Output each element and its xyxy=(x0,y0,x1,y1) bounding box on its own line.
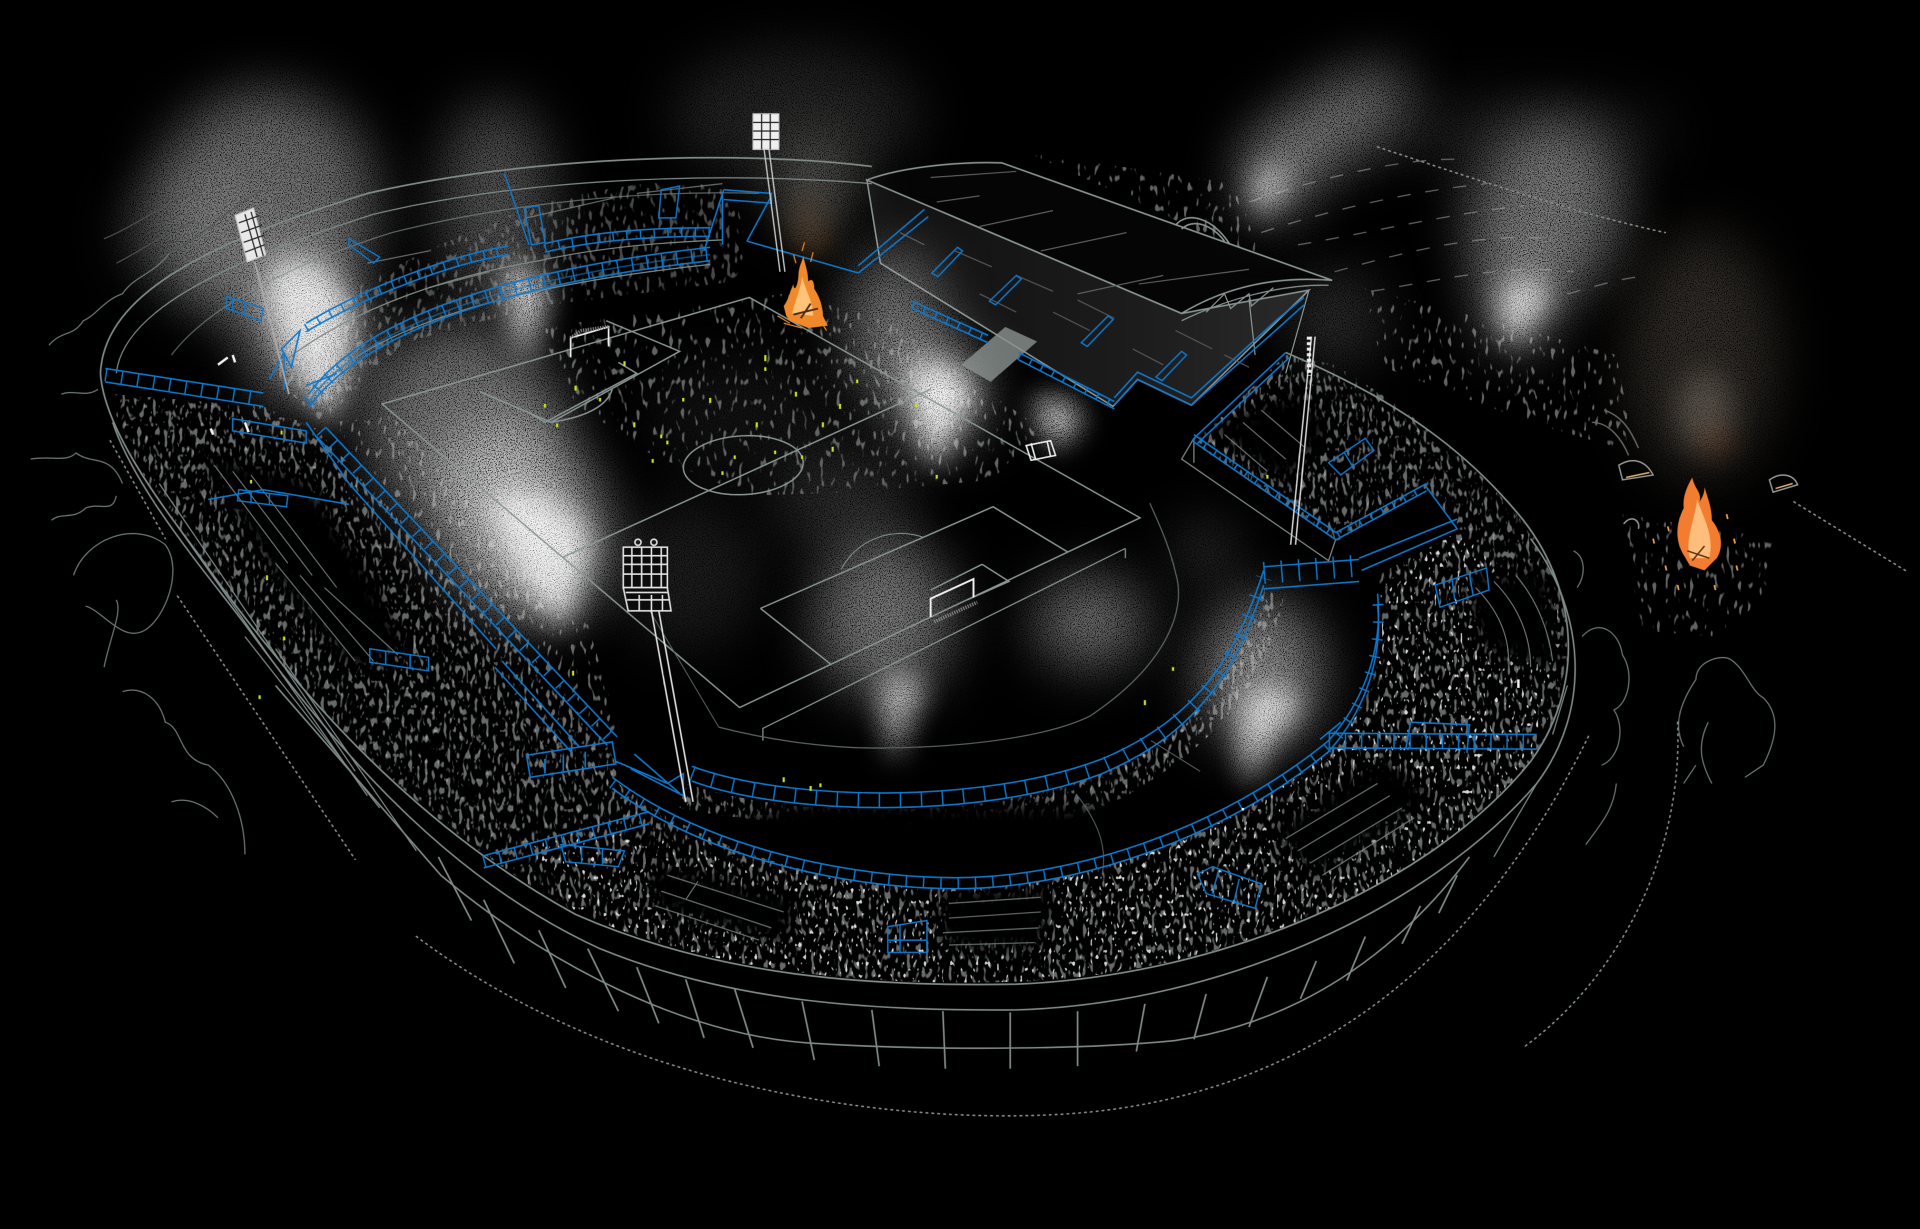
main stand xyxy=(867,163,1332,406)
blue barriers xyxy=(105,174,1537,952)
smoke core: right curve xyxy=(1239,687,1300,783)
smoke core: left touchline xyxy=(490,490,590,624)
plume: pitch goal cloud xyxy=(817,539,951,698)
stairway boxes xyxy=(227,174,1489,952)
barrier: left stand xyxy=(105,331,337,443)
crowd: lower tier xyxy=(113,355,1568,982)
plume: outside top cloud xyxy=(1230,47,1427,210)
roof arch xyxy=(1176,218,1229,244)
crowd: outside the stadium xyxy=(1029,153,1776,637)
smoke core: stand right xyxy=(1035,397,1084,448)
smoke core: upper left xyxy=(503,262,549,357)
outside seating rows xyxy=(1249,159,1641,294)
crowd: upper tier and pitch invaders xyxy=(263,183,1283,831)
smoke core: stand centre xyxy=(911,363,973,463)
upper ring xyxy=(100,158,872,373)
base line xyxy=(276,685,1469,1048)
stadium ring lines xyxy=(100,158,1575,1069)
smoke core: outside top xyxy=(1251,168,1289,218)
smoke plumes xyxy=(120,47,1646,747)
plume: outside right cloud xyxy=(1445,103,1646,326)
barrier: outer ring xyxy=(612,594,1378,889)
pitch flares xyxy=(251,355,1267,791)
smoke: fire right xyxy=(1678,371,1731,449)
plume: right curve cloud xyxy=(1202,600,1320,747)
plume: far left stand, upper cloud xyxy=(120,61,407,355)
floodlight: right xyxy=(1291,337,1315,545)
barrier: upper right section xyxy=(1194,353,1457,589)
stand seating xyxy=(867,180,1309,406)
goal: near end xyxy=(931,579,977,622)
fire outside the stadium xyxy=(1653,477,1738,590)
floodlight: front xyxy=(623,539,693,802)
fire on the pitch xyxy=(778,242,828,331)
barrier: top tier xyxy=(306,228,710,332)
barrier: inner front ring xyxy=(692,570,1264,808)
barrier: lower right xyxy=(1320,722,1537,753)
support stilts xyxy=(438,857,1457,1069)
parked vehicles near fire xyxy=(1592,410,1798,529)
empty seating blocks xyxy=(202,392,1555,949)
smoke core: pitch goal xyxy=(880,673,924,759)
smoke core: far left xyxy=(268,260,353,422)
rim outer xyxy=(113,422,1575,1010)
barrier: lower left xyxy=(484,812,649,868)
plume: left touchline, upper cloud xyxy=(328,289,602,568)
football pitch markings xyxy=(382,297,1200,875)
trees left xyxy=(31,251,245,854)
barrier: main stand xyxy=(704,190,1304,409)
near penalty box xyxy=(760,507,1068,665)
object on the pitch xyxy=(1026,441,1056,460)
plume: upper left stand, upper cloud xyxy=(441,104,551,300)
seat row lines xyxy=(214,184,1553,945)
crowd outer rim xyxy=(100,353,1568,985)
goal: far end xyxy=(571,327,609,357)
floodlight: top left xyxy=(235,208,289,394)
barrier: long touchline xyxy=(208,422,617,753)
truss xyxy=(1182,285,1329,373)
plume: stand centre, upper cloud xyxy=(847,251,940,398)
white flare marks xyxy=(211,355,1518,810)
barrier: lower left corner xyxy=(527,742,683,796)
floodlight: top centre xyxy=(753,114,785,272)
ring side lines xyxy=(1494,685,1567,857)
trees right xyxy=(1573,551,1775,845)
dotted outer paths xyxy=(110,147,1905,1116)
smoke core: outside right xyxy=(1499,281,1550,345)
plume: grey puff xyxy=(1035,578,1145,666)
plume: dark fire smoke pitch xyxy=(778,135,851,233)
barrier: upper tier xyxy=(309,247,710,408)
pale shelter on stand xyxy=(961,327,1037,382)
crowd scribbles top left xyxy=(104,190,263,263)
stand roof xyxy=(867,163,1332,313)
background smoke haze xyxy=(122,49,1776,649)
smoke: fire pitch xyxy=(786,191,830,250)
